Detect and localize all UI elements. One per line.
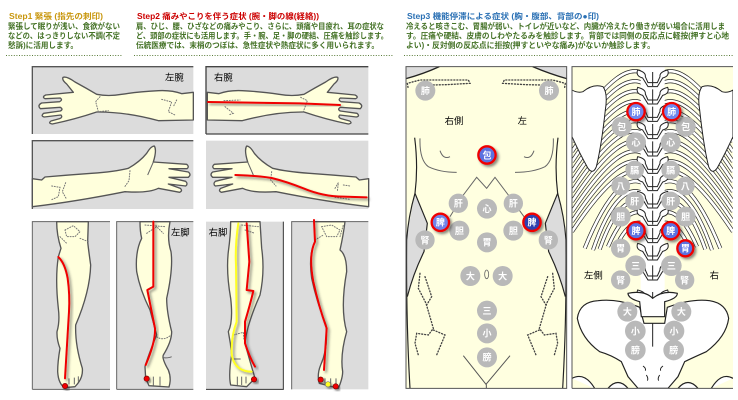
collarbones — [407, 80, 565, 87]
grey acupoints, front: 膀 — [483, 352, 492, 363]
grey acupoints, front: 心 — [483, 203, 492, 214]
grey acupoints, front — [415, 81, 559, 367]
chest and rib outline — [420, 138, 553, 217]
grey acupoints, back: 包 — [681, 121, 690, 132]
red meridian line — [208, 102, 340, 105]
text block: step 2 body: 伝統医療では、末梢のつぼは、急性症状や熱症状に多く用いられます。 — [136, 40, 379, 50]
yellow meridian line — [232, 223, 252, 372]
grey acupoints, front: 胃 — [483, 238, 491, 248]
right leg, side view with meridian — [292, 220, 368, 389]
ribs and shoulder blades — [572, 71, 733, 250]
grey acupoints, front: 肝 — [509, 199, 518, 209]
grey acupoints, back: 膈 — [666, 165, 675, 175]
grey acupoints, back: 肝 — [630, 196, 639, 206]
grey acupoints, back: 小 — [670, 325, 679, 336]
grey acupoints, front: 肺 — [421, 86, 430, 96]
grey acupoints, front: 腎 — [421, 235, 430, 245]
text block: step 1 body: 愁訴)に活用します。 — [8, 40, 78, 50]
heading: step 3: Step3 機能停滞による症状 (胸・腹部、背部の●印) — [407, 11, 599, 21]
grey acupoints, front: 肝 — [454, 199, 463, 209]
active acupoints, back: 脾 — [666, 225, 675, 236]
active acupoints, back: 肺 — [632, 107, 641, 117]
grey acupoints, front: 大 — [498, 270, 507, 281]
grey acupoints, front: 三 — [483, 306, 492, 316]
labels: sides: 左 — [518, 115, 527, 126]
label: right leg: 右脚 — [209, 226, 227, 237]
grey acupoints, front: 小 — [483, 328, 492, 339]
panel: left leg diagrams — [32, 222, 193, 389]
pelvis — [572, 292, 733, 388]
labels: sides — [584, 269, 719, 280]
panel: step 1 text — [8, 11, 120, 50]
grey acupoints, back: 小 — [631, 325, 640, 336]
red and yellow points — [318, 377, 338, 389]
labels: sides: 右 — [710, 269, 719, 280]
red meridian line — [311, 220, 327, 370]
grey acupoints, back: 大 — [677, 306, 686, 317]
panel: torso front — [406, 67, 567, 388]
left leg, side view — [117, 222, 193, 389]
grey acupoints, back: 胆 — [681, 212, 690, 222]
red meridian line — [245, 223, 255, 367]
grey acupoints, back: 八 — [681, 181, 690, 191]
grey acupoints, back: 肝 — [666, 196, 675, 206]
right arm, upper view with meridian — [206, 67, 368, 134]
grey acupoints, front: 胆 — [455, 226, 464, 236]
grey acupoints, back: 腎 — [680, 275, 689, 285]
shoulders and flanks — [406, 67, 567, 388]
panel: step 3 text — [406, 11, 729, 50]
grey acupoints, front: 胆 — [509, 226, 518, 236]
active acupoints, front: 脾 — [436, 217, 445, 228]
active acupoints, back: 脾 — [632, 225, 641, 236]
text block: step 1 body: 緊張して眠りが浅い、食欲がない — [8, 21, 120, 31]
grey acupoints, front: 腎 — [544, 235, 553, 245]
red point — [62, 383, 68, 389]
red point — [144, 376, 149, 381]
grey acupoints, back: 八 — [616, 181, 625, 191]
panel: skeleton back — [572, 67, 733, 388]
panel: right arm diagrams — [206, 67, 369, 209]
panel: left arm diagrams — [32, 67, 193, 209]
panel: right leg diagrams — [206, 220, 368, 389]
active acupoints, back: 胃 — [681, 244, 690, 254]
label: left arm: 左腕 — [165, 71, 184, 82]
left leg, front view — [32, 222, 110, 389]
active acupoints, back — [627, 103, 693, 256]
grey acupoints, back: 腎 — [616, 275, 625, 285]
text block: step 2 body — [136, 21, 388, 50]
red meridian line — [146, 222, 155, 365]
panel: step 2 text — [136, 11, 388, 50]
right arm, lower view with meridian — [206, 141, 369, 209]
grey acupoints, back: 膀 — [669, 344, 678, 355]
labels: sides: 右側 — [445, 115, 463, 126]
grey acupoints, back: 三 — [631, 261, 640, 271]
grey acupoints, back: 胆 — [616, 212, 625, 222]
grey acupoints, front: 大 — [466, 270, 475, 281]
grey acupoints, front: 肺 — [545, 86, 554, 96]
right leg, front view with meridians — [206, 222, 283, 389]
grey acupoints, back: 心 — [632, 137, 641, 148]
text block: step 3 body: す。圧痛や硬結、皮膚のしわやたるみを触診します。背部では同側の反応点に軽按(押すと心地 — [406, 30, 729, 40]
text block: step 2 body: 肩、ひじ、腰、ひざなどの痛みやこり、さらに、頭痛や目疲れ、耳の症状な — [136, 21, 384, 31]
text block: step 3 body — [406, 21, 729, 50]
label: right arm: 右腕 — [214, 71, 233, 82]
text block: step 1 body — [8, 21, 120, 50]
label: left leg: 左脚 — [171, 226, 190, 237]
active acupoints, front: 脾 — [528, 217, 537, 228]
text block: step 3 body: よい)・反対側の反応点に拒按(押すといやな痛み)がないか触診します。 — [406, 40, 655, 50]
text block: step 2 body: ど、頭部の症状にも活用します。手・腕、足・脚の硬結、圧痛を触診します。 — [136, 30, 388, 40]
grey acupoints, back: 包 — [617, 121, 626, 132]
labels: sides: 左側 — [584, 269, 603, 280]
active acupoints, front — [432, 146, 541, 231]
left arm, upper view — [32, 67, 193, 134]
grey acupoints, back: 膀 — [631, 344, 640, 355]
spine — [637, 67, 668, 307]
text block: step 1 body: などの、はっきりしない不調(不定 — [8, 30, 120, 40]
labels: sides — [445, 115, 527, 126]
abdomen lines — [415, 270, 558, 388]
active acupoints, front: 包 — [483, 149, 492, 160]
red point — [251, 377, 257, 382]
grey acupoints, back: 膈 — [630, 165, 639, 175]
heading: step 1: Step1 緊張 (指先の刺印) — [9, 11, 103, 21]
grey acupoints, back: 心 — [666, 137, 675, 148]
left arm, lower view — [32, 141, 193, 209]
active acupoints, back: 肺 — [667, 107, 676, 117]
grey acupoints, back: 三 — [667, 261, 676, 271]
red meridian line — [58, 257, 69, 378]
red meridian line — [235, 175, 367, 197]
grey acupoints, back: 胃 — [616, 244, 625, 254]
grey acupoints, back — [611, 117, 696, 360]
heading: step 2: Step2 痛みやこりを伴う症状 (腕・脚の線(経絡)) — [137, 11, 319, 21]
grey acupoints, back: 大 — [623, 306, 632, 317]
